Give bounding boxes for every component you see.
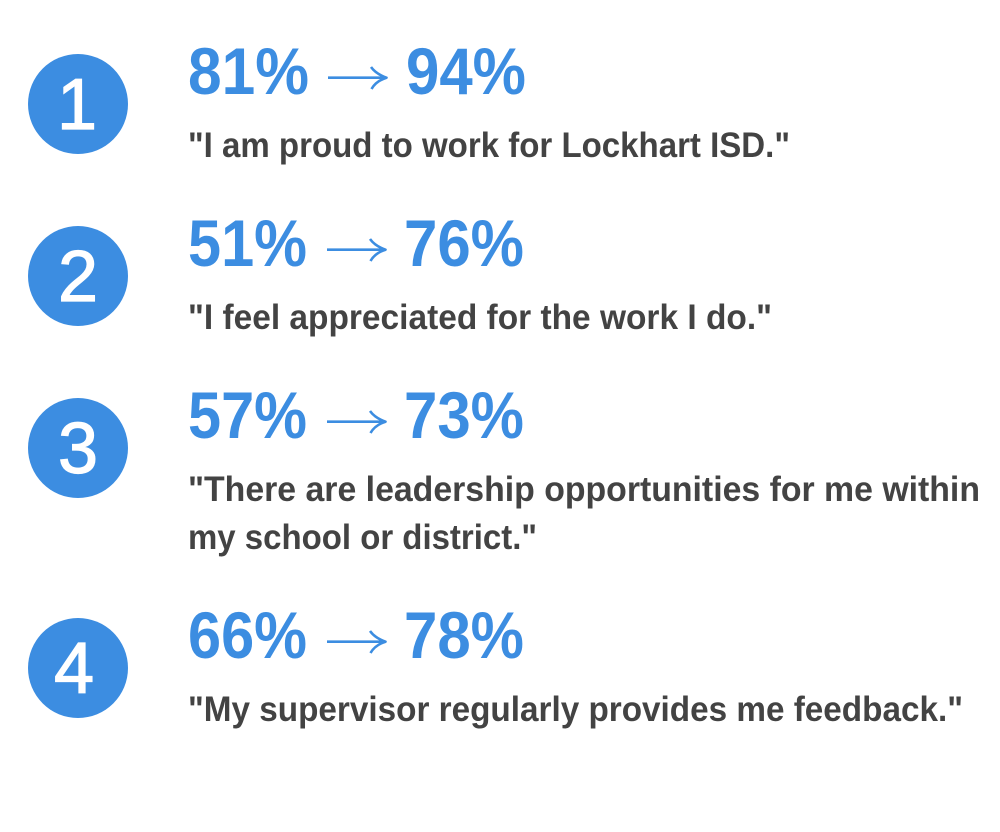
statistic 2: 51% to 76%: 76% [404, 206, 524, 280]
item 3 [28, 378, 980, 557]
number badge 4 [28, 618, 128, 718]
number badge 4: 4 [54, 629, 94, 709]
quote 1: "I am proud to work for Lockhart ISD." [188, 126, 790, 165]
statistic 4: 66% to 78%: 78% [404, 598, 524, 672]
statistic 2: 51% to 76% [188, 206, 524, 280]
statistic 1: 81% to 94%: 81% [188, 34, 309, 108]
quote 3: "There are leadership opportunities for me within [188, 470, 980, 509]
item 4 [28, 598, 963, 729]
number badge 1 [28, 54, 128, 154]
arrow 2 [327, 239, 386, 261]
statistic 3: 57% to 73%: 57% [188, 378, 307, 452]
statistic 4: 66% to 78%: 66% [188, 598, 307, 672]
statistic 4: 66% to 78% [188, 598, 524, 672]
number badge 1: 1 [57, 65, 97, 145]
number badge 2: 2 [58, 237, 98, 317]
arrow 4 [327, 631, 386, 653]
number badge 2 [28, 226, 128, 326]
quote 2: "I feel appreciated for the work I do." [188, 298, 772, 337]
item 1 [28, 34, 790, 165]
item 2 [28, 206, 772, 337]
quote 4: "My supervisor regularly provides me feedback." [188, 690, 963, 729]
arrow 3 [327, 411, 386, 433]
arrow 1 [328, 67, 386, 89]
quote 3: my school or district." [188, 518, 537, 557]
number badge 3: 3 [58, 409, 98, 489]
statistic 1: 81% to 94%: 94% [406, 34, 526, 108]
number badge 3 [28, 398, 128, 498]
statistic 1: 81% to 94% [188, 34, 526, 108]
statistic 3: 57% to 73%: 73% [404, 378, 524, 452]
quote 3 [188, 470, 980, 557]
statistic 3: 57% to 73% [188, 378, 524, 452]
statistic 2: 51% to 76%: 51% [188, 206, 307, 280]
